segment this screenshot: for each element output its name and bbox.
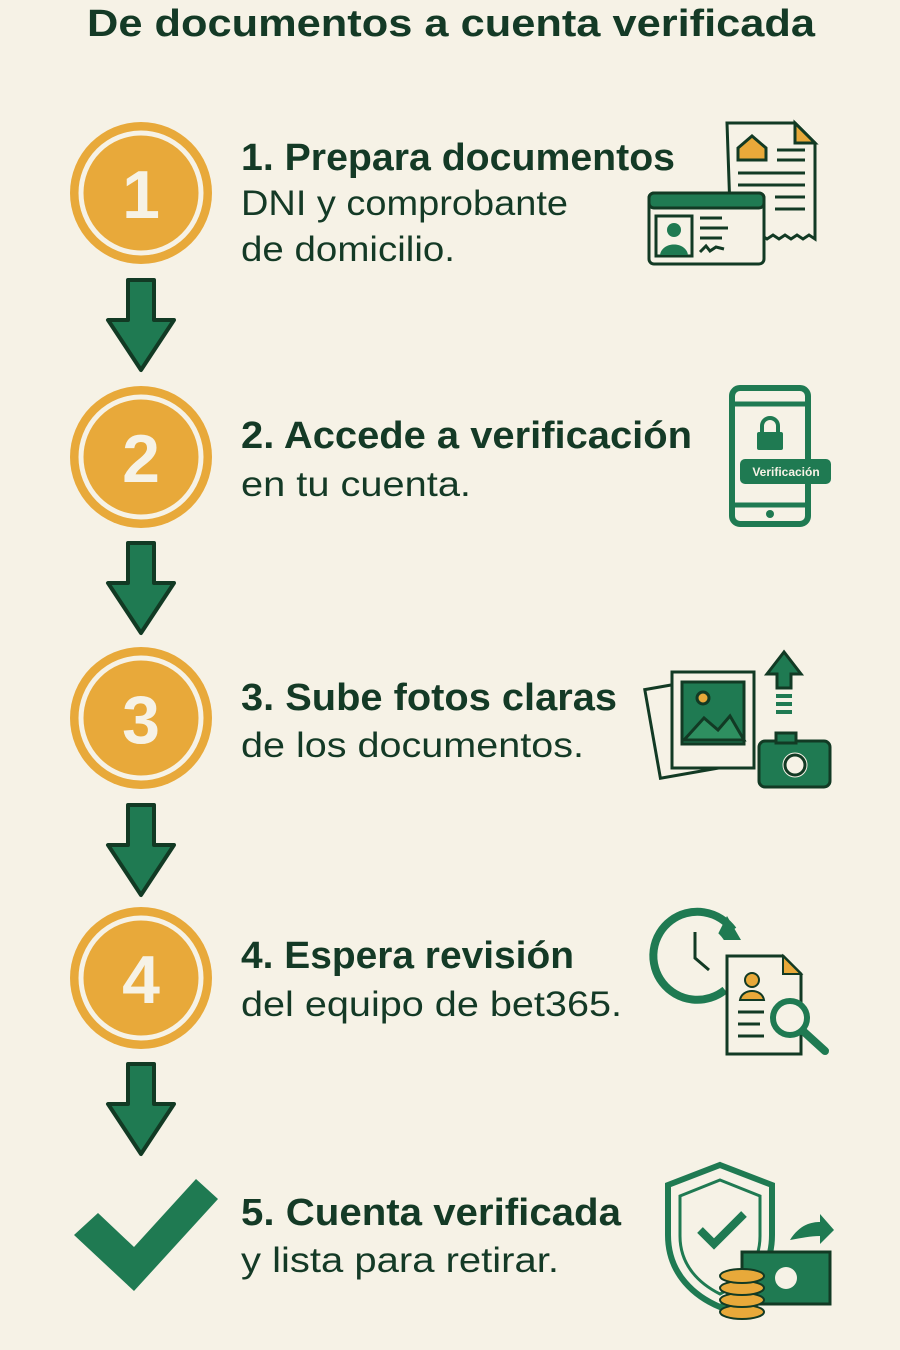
step 3 text: de los documentos. (241, 726, 584, 765)
step 2 text (241, 415, 692, 504)
step 5 text: 5. Cuenta verificada (241, 1192, 622, 1234)
step 4 text: del equipo de bet365. (241, 985, 622, 1024)
icon: photos upload camera (645, 652, 830, 787)
step 5 text (241, 1192, 622, 1280)
step 5 text: y lista para retirar. (241, 1241, 559, 1280)
step 3 circle (70, 647, 212, 789)
step 1 circle (70, 122, 212, 264)
step 4 text: 4. Espera revisión (241, 935, 574, 977)
step 1 text: 1. Prepara documentos (241, 137, 675, 179)
step 2 text: 2. Accede a verificación (241, 415, 692, 457)
step 1 text: DNI y comprobante (241, 184, 568, 223)
step 2 text: en tu cuenta. (241, 465, 471, 504)
step 4 circle: 4 (122, 942, 160, 1018)
icon: documents (649, 123, 815, 264)
icon: check mark (74, 1179, 218, 1291)
step 3 text: 3. Sube fotos claras (241, 677, 617, 719)
step 4 text (241, 935, 622, 1024)
step 4 circle (70, 907, 212, 1049)
icon: shield money (668, 1165, 834, 1319)
arrow 3 (108, 805, 174, 895)
title: De documentos a cuenta verificada (87, 3, 816, 45)
arrow 1 (108, 280, 174, 370)
step 1 text (241, 137, 675, 269)
icon: clock and search (653, 912, 825, 1054)
arrow 4 (108, 1064, 174, 1154)
step 2 circle (70, 386, 212, 528)
step 1 text: de domicilio. (241, 230, 455, 269)
step 3 circle: 3 (122, 682, 160, 758)
step 2 circle: 2 (122, 421, 160, 497)
step 1 circle: 1 (122, 157, 160, 233)
icon: phone (732, 388, 831, 524)
arrow 2 (108, 543, 174, 633)
icon: phone: Verificación (752, 465, 820, 479)
step 3 text (241, 677, 617, 765)
